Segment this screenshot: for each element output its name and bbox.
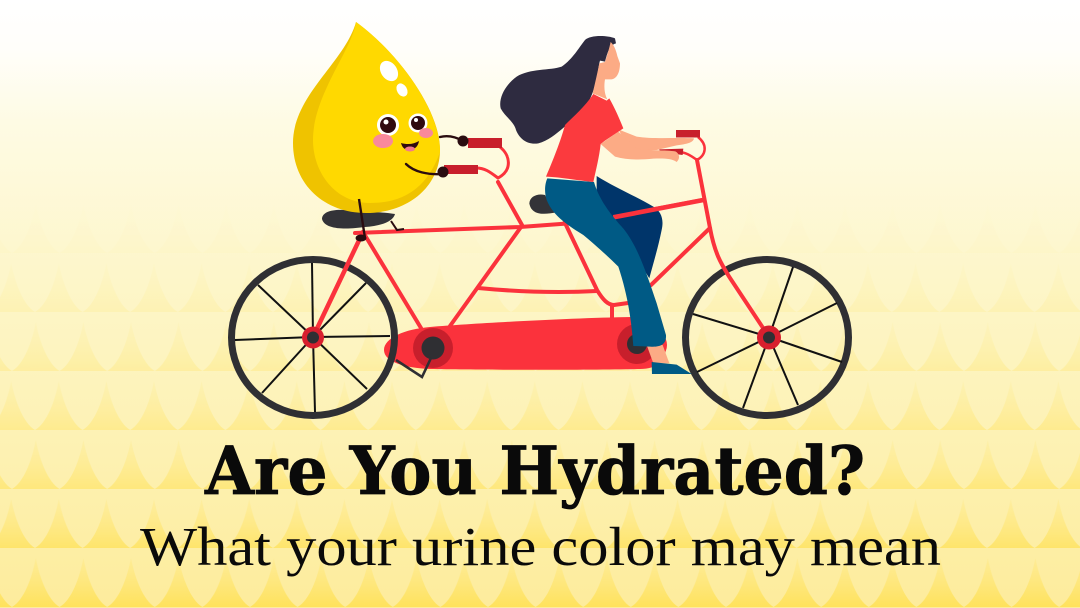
drop lighter face xyxy=(313,22,440,203)
ankle xyxy=(647,345,669,363)
legs and feet xyxy=(356,199,404,242)
tube behind leg xyxy=(563,220,577,225)
shirt xyxy=(546,94,623,182)
frame tubes xyxy=(313,160,769,337)
front hub xyxy=(757,326,781,350)
top tube over far leg xyxy=(613,200,703,217)
rear wheel xyxy=(232,260,394,416)
woman riding xyxy=(500,36,703,374)
drop character xyxy=(293,22,468,242)
highlights xyxy=(376,57,410,99)
chain guard with chainrings xyxy=(384,317,667,370)
hands xyxy=(438,136,468,178)
far leg xyxy=(597,176,663,278)
rear seat xyxy=(322,210,395,229)
hair xyxy=(500,36,616,144)
far grip xyxy=(659,149,683,155)
eyes xyxy=(377,114,428,136)
front wheel xyxy=(686,260,848,416)
drop body xyxy=(293,22,440,213)
saddle xyxy=(529,195,555,214)
near arm xyxy=(618,129,694,150)
mouth xyxy=(401,141,419,152)
subtitle: What your urine color may mean xyxy=(140,516,941,577)
rear handlebars xyxy=(444,138,508,178)
arms xyxy=(406,136,463,174)
tandem bicycle xyxy=(232,130,848,416)
front handlebars xyxy=(676,130,705,160)
cheeks xyxy=(373,128,433,148)
forearm xyxy=(601,132,679,162)
face and neck xyxy=(593,42,620,99)
rear hub xyxy=(302,326,324,348)
shoe xyxy=(652,362,692,374)
left crank arm xyxy=(396,358,431,377)
title: Are You Hydrated? xyxy=(204,432,865,510)
near leg xyxy=(545,178,666,347)
